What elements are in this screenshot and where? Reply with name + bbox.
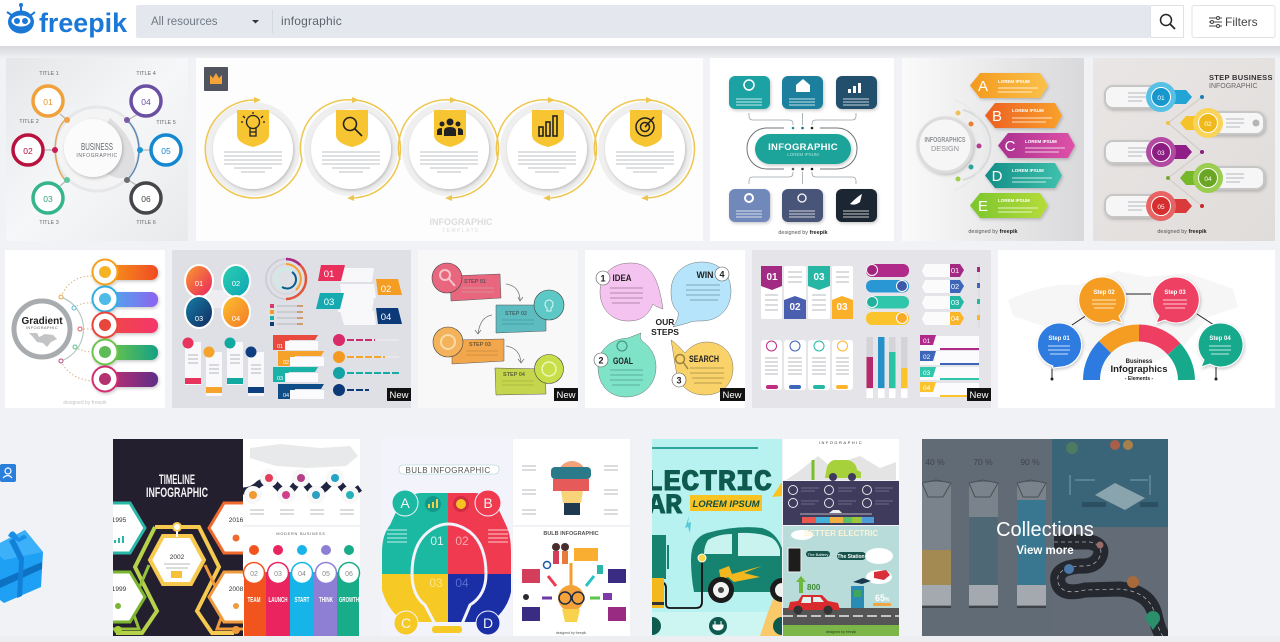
search bar: infographic: [281, 14, 342, 28]
title: INFOGRAPHIC: [146, 484, 208, 500]
percent labels: 40 %: [925, 457, 945, 467]
infographic electric panel: [783, 439, 899, 525]
yellow label: LOREM IPSUM: [692, 499, 761, 510]
tag B: B: [992, 108, 1002, 125]
thumbnail: gradient infographic: Gradient: [21, 316, 63, 327]
puzzle bulb quarters: [382, 493, 448, 574]
tag A: LOREM IPSUM: [998, 79, 1030, 84]
modern business panel: [243, 527, 360, 636]
title: [146, 471, 208, 500]
modern business panel: 05: [322, 571, 330, 578]
title: TIMELINE: [159, 471, 195, 487]
tag D: LOREM IPSUM: [1012, 168, 1044, 173]
collection card: electric car: [645, 439, 899, 636]
tag C: LOREM IPSUM: [1025, 139, 1057, 144]
vertical bars: [866, 337, 908, 398]
better electric panel: 800: [807, 583, 821, 592]
tag C: C: [1005, 138, 1016, 155]
bubble: goal: [598, 333, 656, 397]
angled rows: [273, 335, 324, 399]
step 05: [1105, 191, 1204, 221]
bubble: step 03: [1153, 277, 1199, 323]
bubble: step 03: Step 03: [1164, 290, 1186, 296]
tag E: LOREM IPSUM: [998, 198, 1030, 203]
legend: [270, 304, 303, 326]
number cards: 02: [789, 302, 801, 313]
step titles: TITLE 4: [136, 71, 156, 77]
brain bulb panel: designed by freepik: [556, 631, 586, 635]
hex 1995: 1995: [112, 517, 127, 524]
bubble: goal: GOAL: [613, 356, 633, 366]
thumbnail: business infographics elements: [998, 250, 1275, 408]
our steps label: OUR: [656, 317, 674, 327]
gift box: [0, 530, 43, 603]
electric title: [652, 470, 772, 514]
new badge: New: [556, 390, 576, 401]
four circles: 03: [195, 314, 203, 323]
center pill: LOREM IPSUM: [787, 152, 819, 157]
connectors: [749, 113, 856, 184]
pill 3: [92, 312, 158, 338]
arch title: Infographics: [1110, 364, 1168, 375]
step 03: 03: [1157, 150, 1165, 157]
better electric panel: The Station: [837, 554, 865, 560]
bubble: win: WIN: [696, 270, 714, 280]
thumbnail: infographics design tags: DESIGN: [931, 146, 959, 153]
parallelogram rows: 02: [381, 284, 391, 295]
tag C: [998, 133, 1075, 158]
parallelogram rows: 01: [324, 269, 334, 280]
connector arrows: [1052, 294, 1217, 379]
curved arrows: [475, 284, 524, 363]
hex 2016: [207, 502, 243, 554]
better electric panel: The Battery: [808, 552, 828, 557]
plug icon: [709, 617, 727, 635]
ring 05: [151, 135, 181, 165]
step titles: TITLE 2: [19, 119, 39, 125]
collection card: bulb infographic: A: [400, 495, 410, 511]
search button: [1150, 6, 1184, 38]
thumbnail: our steps speech bubbles: 2: [598, 356, 604, 366]
box icons: [744, 79, 862, 205]
parallelogram rows: 03: [324, 297, 334, 308]
step 03: [433, 327, 504, 364]
hex 1999: 1999: [112, 586, 127, 593]
tag rows: [922, 263, 980, 328]
road: [1054, 542, 1168, 640]
brain bulb panel: BULB INFOGRAPHIC: [543, 531, 599, 537]
pill 5: [92, 366, 158, 392]
tag B: LOREM IPSUM: [1012, 108, 1044, 113]
thumbnail: our steps speech bubbles: 4: [719, 270, 725, 280]
four circles: 04: [232, 314, 240, 323]
car: [691, 527, 782, 603]
ring 04: [131, 86, 161, 116]
step titles: [19, 71, 176, 226]
color pills: [866, 264, 909, 325]
thumbnail: our steps speech bubbles: 1: [600, 274, 606, 284]
title: STEP BUSINESS: [1209, 73, 1273, 82]
ring 02: 02: [23, 146, 33, 156]
pill 4: [92, 340, 158, 364]
bubble: idea: IDEA: [612, 273, 632, 283]
modern business panel: 03: [274, 571, 282, 578]
crown badge: [204, 67, 228, 91]
bubble: step 02: [1079, 277, 1125, 323]
step 02: [1166, 108, 1264, 138]
collections text: [996, 519, 1094, 557]
ring 06: 06: [141, 194, 151, 204]
modern business panel: MODERN BUSINESS: [276, 532, 326, 536]
tag rows: 02: [951, 282, 959, 291]
bubble: idea: [600, 263, 663, 321]
step 05: 05: [1157, 204, 1165, 211]
arch chart: [1092, 333, 1186, 380]
tag D: D: [992, 168, 1003, 185]
step titles: TITLE 1: [39, 71, 59, 77]
four circles: 02: [232, 279, 240, 288]
tag B: [985, 103, 1062, 128]
ring 05: 05: [161, 146, 171, 156]
thumbnail: infographics design tags: [902, 58, 1084, 241]
bubble: step 02: Step 02: [1093, 290, 1115, 296]
ring 06: [131, 183, 161, 213]
thumbnail: our steps speech bubbles: 3: [676, 376, 682, 386]
tag rows: 01: [951, 266, 959, 275]
modern business panel: 06: [345, 571, 353, 578]
collection card: bulb infographic: 01: [430, 534, 444, 548]
header shadow: [0, 46, 1280, 59]
modern business panel: GROWTH: [339, 595, 359, 604]
bubble: step 01: [1037, 323, 1082, 368]
bubble: search: [671, 340, 733, 395]
dotted progress: [333, 334, 399, 396]
modern business panel: 04: [298, 571, 306, 578]
better electric panel: designed by freepik: [826, 630, 856, 634]
credit: designed by freepik: [778, 230, 829, 236]
icon: light bulb: [241, 112, 265, 136]
ring 03: [33, 183, 63, 213]
numbered rows: 02: [923, 354, 931, 361]
thumbnail: numbered element kit: [752, 250, 991, 408]
percent labels: [926, 459, 1040, 465]
tag D: [985, 163, 1062, 188]
step 02: STEP 02: [505, 311, 527, 317]
tag rows: 03: [951, 298, 959, 307]
ring 04: 04: [141, 97, 151, 107]
infographic electric panel: INFOGRAPHIC: [819, 440, 863, 445]
center title: BUSINESS: [81, 142, 113, 153]
pill 2: [92, 286, 158, 312]
ring chart: [266, 259, 306, 299]
step 03: STEP 03: [469, 342, 491, 348]
icon: team: [437, 118, 463, 136]
bottom fade: [0, 636, 1280, 642]
credit: designed by freepik: [63, 400, 107, 406]
number cards: 03: [813, 272, 825, 283]
number cards: [761, 266, 853, 319]
thumbnail: infographic boxes: [710, 58, 894, 241]
thumbnail: hand drawn steps: [418, 250, 578, 408]
angled rows: 02: [283, 360, 289, 366]
modern business panel: THINK: [319, 595, 333, 604]
collections overlay card: [922, 439, 1168, 640]
ring 01: 01: [43, 97, 53, 107]
step titles: TITLE 5: [156, 120, 176, 126]
icon: magnifier: [344, 118, 362, 136]
template caption: TEMPLATE: [442, 228, 480, 234]
map panel: [243, 439, 360, 525]
angled rows: 03: [277, 376, 283, 382]
collections text: Collections: [996, 519, 1094, 541]
collection card: bulb infographic: D: [483, 615, 493, 631]
icon: bars: [539, 116, 557, 136]
bubble: search: SEARCH: [689, 354, 719, 364]
search bar: All resources: [151, 16, 218, 28]
tag rows: 04: [951, 314, 959, 323]
step 02: 02: [1204, 121, 1212, 128]
center title: INFOGRAPHIC: [76, 153, 118, 159]
hex 2016: 2016: [229, 517, 244, 524]
our steps label: STEPS: [651, 327, 679, 337]
electric title: LECTRIC: [645, 466, 772, 500]
modern business panel: LAUNCH: [268, 595, 288, 604]
step titles: TITLE 3: [39, 220, 59, 226]
top boxes: [729, 76, 877, 109]
credit: designed by freepik: [968, 229, 1019, 235]
hex 1995: [113, 502, 147, 554]
tag A: A: [978, 78, 988, 95]
modern business panel: TEAM: [248, 595, 260, 604]
arch title: Business: [1126, 359, 1153, 365]
hex 2008: 2008: [229, 586, 244, 593]
light bulb panel: [513, 439, 630, 525]
collection card: bulb infographic: 04: [455, 576, 469, 590]
thumbnail: our steps speech bubbles: [585, 250, 745, 408]
center pill: [747, 125, 857, 172]
numbered rows: 04: [923, 385, 931, 392]
credit: designed by freepik: [1157, 229, 1208, 235]
charging station: [652, 535, 668, 608]
number circles: [594, 267, 729, 387]
arch title: [1110, 359, 1168, 382]
bubble: win: [671, 262, 731, 327]
ring cards: [761, 340, 853, 390]
thumbnail: five yellow circles: [196, 58, 703, 241]
tag A: [970, 73, 1048, 98]
ring 01: [33, 86, 63, 116]
collection card: bulb infographic: B: [483, 495, 493, 511]
our steps label: [651, 317, 679, 337]
better electric panel: 65%: [875, 593, 890, 603]
collection card: bulb infographic: 02: [455, 534, 469, 548]
ring 02: [13, 135, 43, 165]
step 04: [1166, 163, 1264, 193]
thumbnail: infographics design tags: INFOGRAPHICS: [924, 137, 966, 144]
step 01: [432, 263, 501, 301]
numbered rows: 03: [923, 370, 931, 377]
header bar: [0, 0, 1280, 46]
hex 2002: [150, 536, 204, 584]
center title: [76, 142, 118, 159]
percent labels: 70 %: [973, 457, 993, 467]
step 01: STEP 01: [464, 279, 486, 285]
better electric panel: BETTER ELECTRIC: [804, 529, 878, 538]
step 02: [496, 290, 564, 333]
step 04: 04: [1204, 176, 1212, 183]
step 01: 01: [1157, 95, 1165, 102]
four circles: [185, 265, 250, 328]
chart hints: [1070, 475, 1150, 495]
number cards: 03: [836, 302, 848, 313]
collection card: timeline infographic: [100, 439, 360, 636]
bottom boxes: [729, 189, 877, 222]
bubble: step 01: Step 01: [1048, 336, 1070, 342]
tall columns: [182, 338, 264, 396]
bulb title: BULB INFOGRAPHIC: [405, 466, 491, 475]
template caption: INFOGRAPHIC: [430, 217, 493, 227]
electric title: AR: [648, 491, 682, 522]
hex timeline: [113, 502, 243, 635]
yellow arrows: [205, 100, 694, 198]
template caption: [430, 217, 493, 234]
step 04: [495, 354, 564, 395]
new badge: New: [722, 390, 742, 401]
tag E: E: [978, 198, 988, 215]
icon shields: [237, 110, 662, 147]
hex 2002: 2002: [170, 554, 185, 561]
logo: freepik: freepik: [39, 8, 128, 38]
collections text: View more: [1016, 545, 1074, 557]
thumbnail: business infographic: [6, 58, 188, 241]
numbered rows: 01: [923, 338, 931, 345]
title: INFOGRAPHIC: [1209, 83, 1258, 90]
brain bulb panel: [513, 527, 630, 636]
arch title: - Elements -: [1125, 376, 1154, 382]
thumbnail: step business infographic: [1093, 58, 1275, 241]
search bar: [136, 5, 1150, 38]
thumbnail: infographic element set: [172, 250, 411, 408]
new badge: [554, 388, 578, 401]
hex 2008: [207, 570, 243, 624]
collection card: bulb infographic: C: [401, 615, 411, 631]
new badge: [967, 388, 991, 401]
percent labels: 90 %: [1020, 457, 1040, 467]
number cards: 01: [766, 272, 778, 283]
tag E: [970, 193, 1048, 218]
thumbnail: gradient infographic: INFOGRAPHIC: [26, 325, 58, 330]
glass bars: [922, 480, 1046, 607]
new badge: New: [389, 390, 409, 401]
modern business panel: 02: [250, 571, 258, 578]
hex 1999: [113, 570, 147, 624]
thumbnail: gradient infographic: [5, 250, 165, 408]
parallelogram rows: [316, 265, 402, 325]
step titles: TITLE 6: [136, 220, 156, 226]
charging cable: [664, 562, 703, 609]
icon: target: [636, 117, 654, 136]
world map: [1008, 271, 1238, 371]
filters button: [1192, 6, 1275, 38]
new badge: [720, 388, 745, 401]
step 04: STEP 04: [503, 372, 526, 378]
collection card: bulb infographic: [382, 439, 630, 636]
bubble: step 04: [1198, 323, 1243, 367]
parallelogram rows: 04: [381, 312, 391, 323]
modern business panel: START: [294, 595, 310, 604]
new badge: New: [969, 390, 989, 401]
pill 1: [92, 260, 158, 284]
yellow label: [690, 495, 762, 511]
angled rows: 01: [277, 344, 283, 350]
angled rows: 04: [283, 393, 289, 399]
step 01: [1105, 82, 1204, 112]
collection card: bulb infographic: 03: [429, 576, 443, 590]
center pill: INFOGRAPHIC: [768, 142, 838, 153]
step 03: [1105, 137, 1204, 167]
map pins: [1064, 542, 1160, 630]
numbered rows: [920, 335, 979, 397]
account badge: [0, 464, 16, 482]
bubble: step 04: Step 04: [1209, 336, 1231, 342]
ring 03: 03: [43, 194, 53, 204]
better electric panel: [783, 526, 899, 636]
new badge: [387, 388, 411, 401]
filters button: Filters: [1225, 15, 1258, 29]
title: [1209, 73, 1273, 90]
logo: freepik: [7, 3, 128, 38]
four circles: 01: [195, 279, 203, 288]
